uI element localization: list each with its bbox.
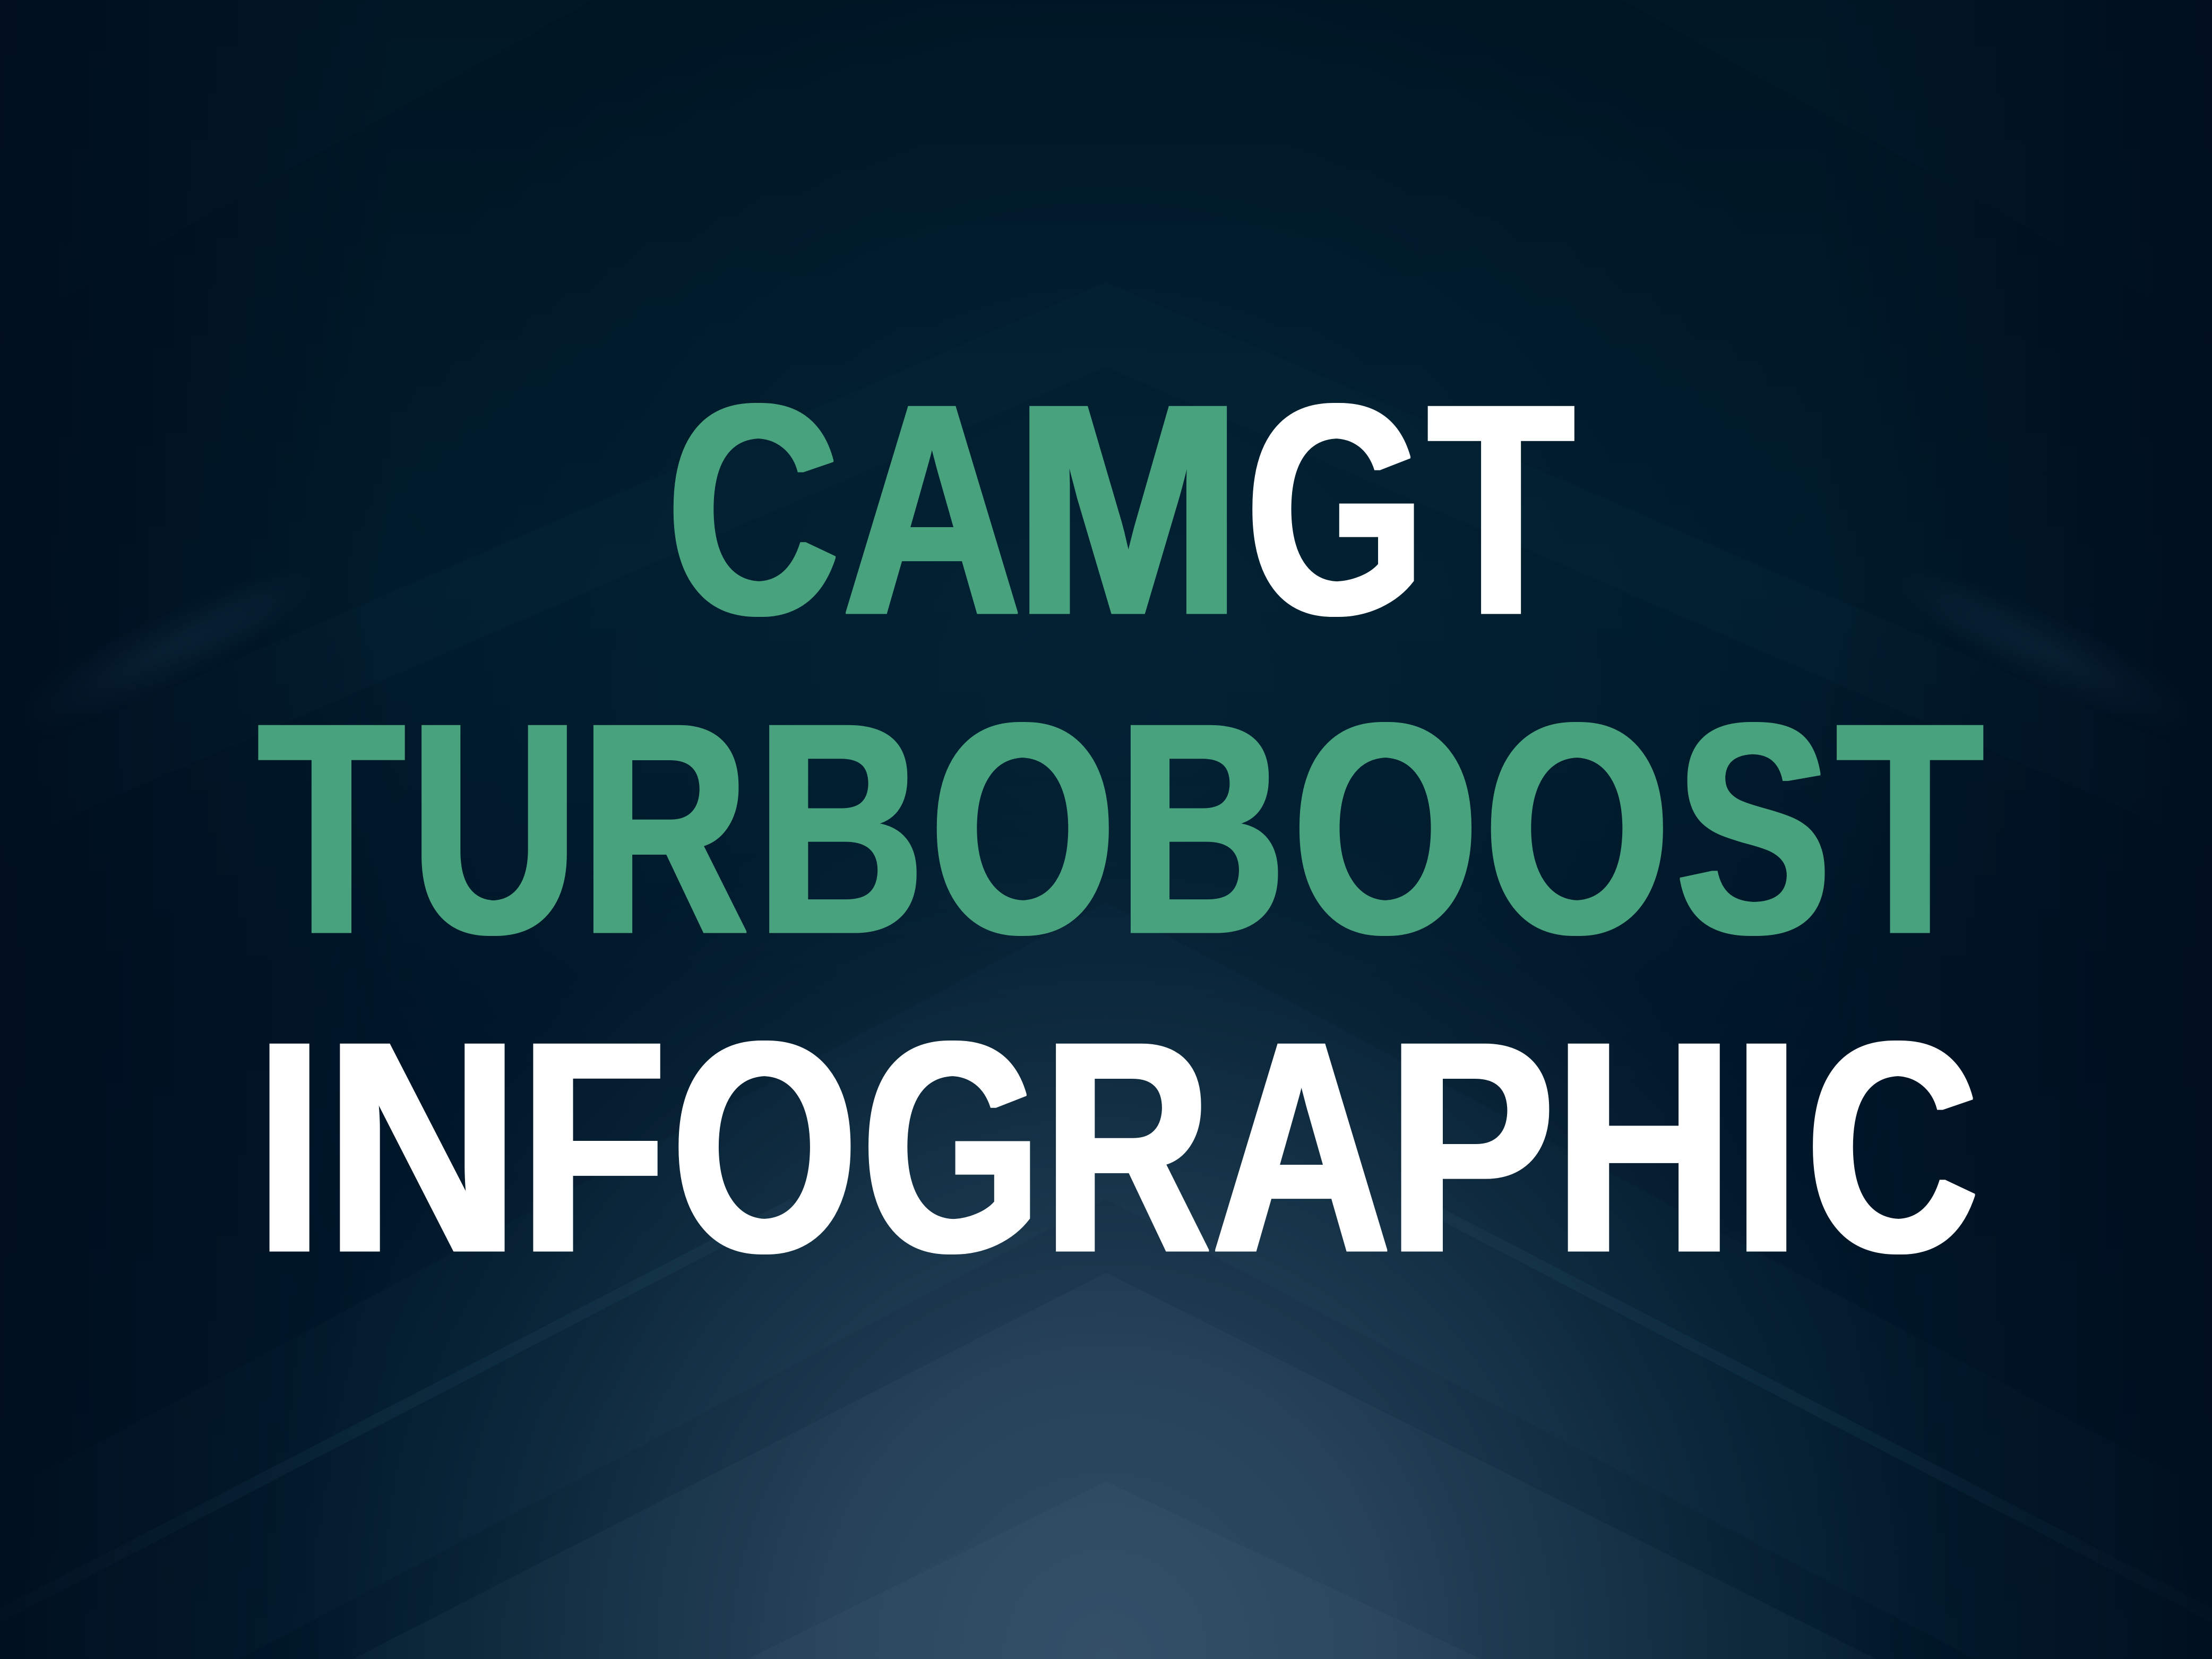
title line 3: INFOGRAPHIC: N [324, 980, 520, 1314]
title line 1: CAMGT: G [1245, 342, 1426, 677]
title line 3: INFOGRAPHIC: O [672, 980, 858, 1314]
title line 2: TURBOBOOST: T [258, 661, 405, 996]
title line 2: TURBOBOOST: T [1837, 661, 1983, 996]
title line 2: TURBOBOOST: O [1484, 661, 1671, 996]
title line 2: TURBOBOOST: S [1676, 661, 1831, 996]
title line 3: INFOGRAPHIC: F [520, 980, 666, 1314]
title line 1: CAMGT: A [842, 342, 1022, 677]
title line 2: TURBOBOOST: B [756, 661, 925, 996]
title line 3: INFOGRAPHIC: A [1211, 980, 1391, 1314]
title line 2: TURBOBOOST: U [410, 661, 579, 996]
title line 2: TURBOBOOST: O [929, 661, 1116, 996]
title line 3: INFOGRAPHIC: G [862, 980, 1042, 1314]
title line 2: TURBOBOOST: B [1118, 661, 1286, 996]
title line 3: INFOGRAPHIC: I [1733, 980, 1800, 1314]
title [256, 342, 1983, 1314]
title line 2: TURBOBOOST: R [581, 661, 748, 996]
title line 3: INFOGRAPHIC: R [1043, 980, 1211, 1314]
title line 1: CAMGT: C [666, 342, 840, 677]
title line 1: CAMGT: M [1014, 342, 1243, 677]
title line 1: CAMGT: T [1428, 342, 1574, 677]
title line 3: INFOGRAPHIC: P [1387, 980, 1555, 1314]
title line 3: INFOGRAPHIC: H [1554, 980, 1734, 1314]
title line 2: TURBOBOOST: O [1292, 661, 1479, 996]
title line 3: INFOGRAPHIC: I [256, 980, 323, 1314]
title line 3: INFOGRAPHIC: C [1806, 980, 1979, 1314]
